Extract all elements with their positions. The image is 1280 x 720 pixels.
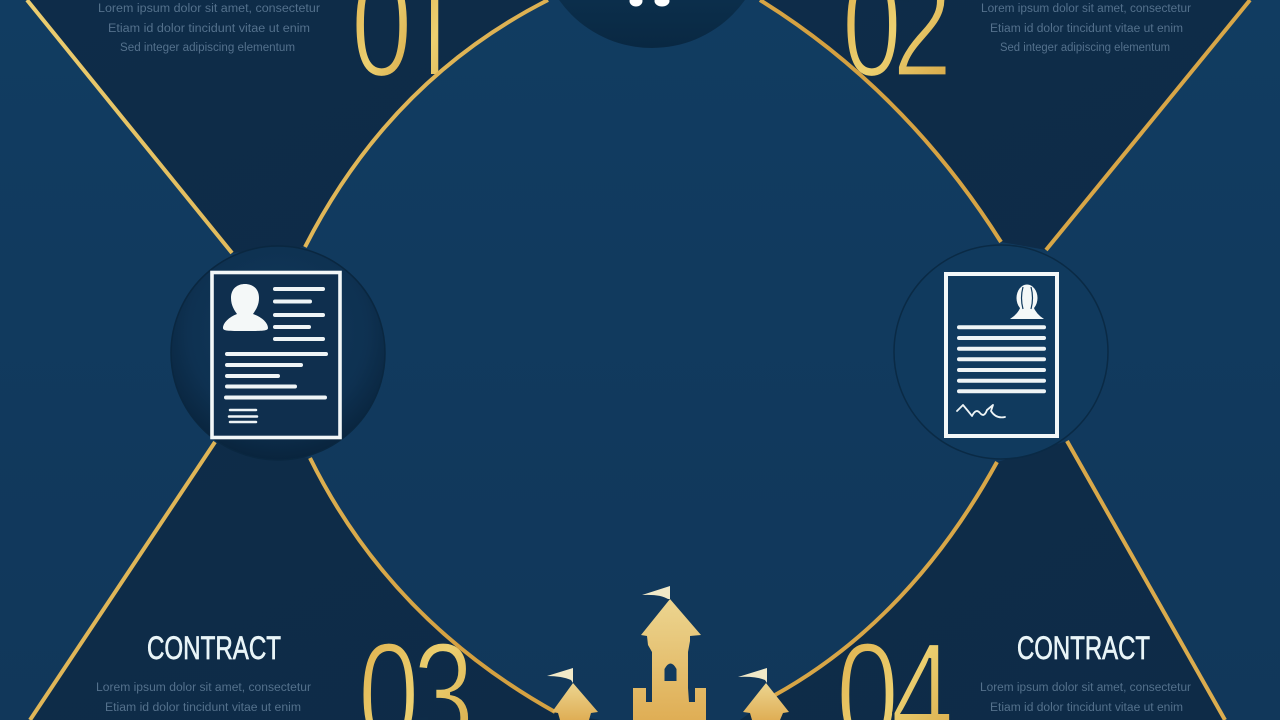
right flag bbox=[738, 668, 767, 683]
icon: top circle bbox=[538, 0, 766, 48]
panel: top left bbox=[27, 0, 548, 253]
text block: Etiam id dolor tincidunt vitae ut enim bbox=[105, 702, 301, 714]
gold central oval bbox=[305, 0, 1001, 712]
panel: top right bbox=[760, 0, 1250, 250]
text block: Lorem ipsum dolor sit amet, consectetur bbox=[980, 682, 1191, 694]
center flag bbox=[642, 586, 670, 599]
block: bottom left bbox=[96, 630, 311, 714]
block: bottom right bbox=[980, 630, 1191, 714]
text block: top right: Sed integer adipiscing elementum bbox=[1000, 42, 1170, 54]
text block: top right: Etiam id dolor tincidunt vitae ut enim bbox=[990, 23, 1183, 35]
text block bbox=[980, 682, 1191, 714]
text block: top left: Etiam id dolor tincidunt vitae ut enim bbox=[108, 23, 310, 35]
number 01 bbox=[356, 0, 438, 76]
text block: Lorem ipsum dolor sit amet, consectetur bbox=[96, 682, 311, 694]
text block: top right: Lorem ipsum dolor sit amet, consectetur bbox=[981, 3, 1191, 15]
heading: CONTRACT bbox=[147, 630, 281, 666]
heading: CONTRACT bbox=[1017, 630, 1150, 666]
text block: top left: Sed integer adipiscing elementum bbox=[120, 42, 295, 54]
icon: castle bbox=[547, 586, 789, 720]
icon: left resume bbox=[171, 246, 385, 460]
right tower bbox=[743, 683, 789, 720]
window bbox=[664, 664, 676, 681]
center tower bbox=[633, 599, 706, 720]
panel: bottom right bbox=[740, 441, 1225, 720]
icon: right contract bbox=[894, 245, 1108, 459]
text block: Etiam id dolor tincidunt vitae ut enim bbox=[990, 702, 1183, 714]
left tower bbox=[552, 683, 598, 720]
text block: top right bbox=[981, 3, 1191, 54]
text block bbox=[96, 682, 311, 714]
left flag bbox=[547, 668, 573, 683]
text block: top left bbox=[98, 3, 320, 54]
text block: top left: Lorem ipsum dolor sit amet, consectetur bbox=[98, 3, 320, 15]
panel: bottom left bbox=[30, 442, 600, 720]
